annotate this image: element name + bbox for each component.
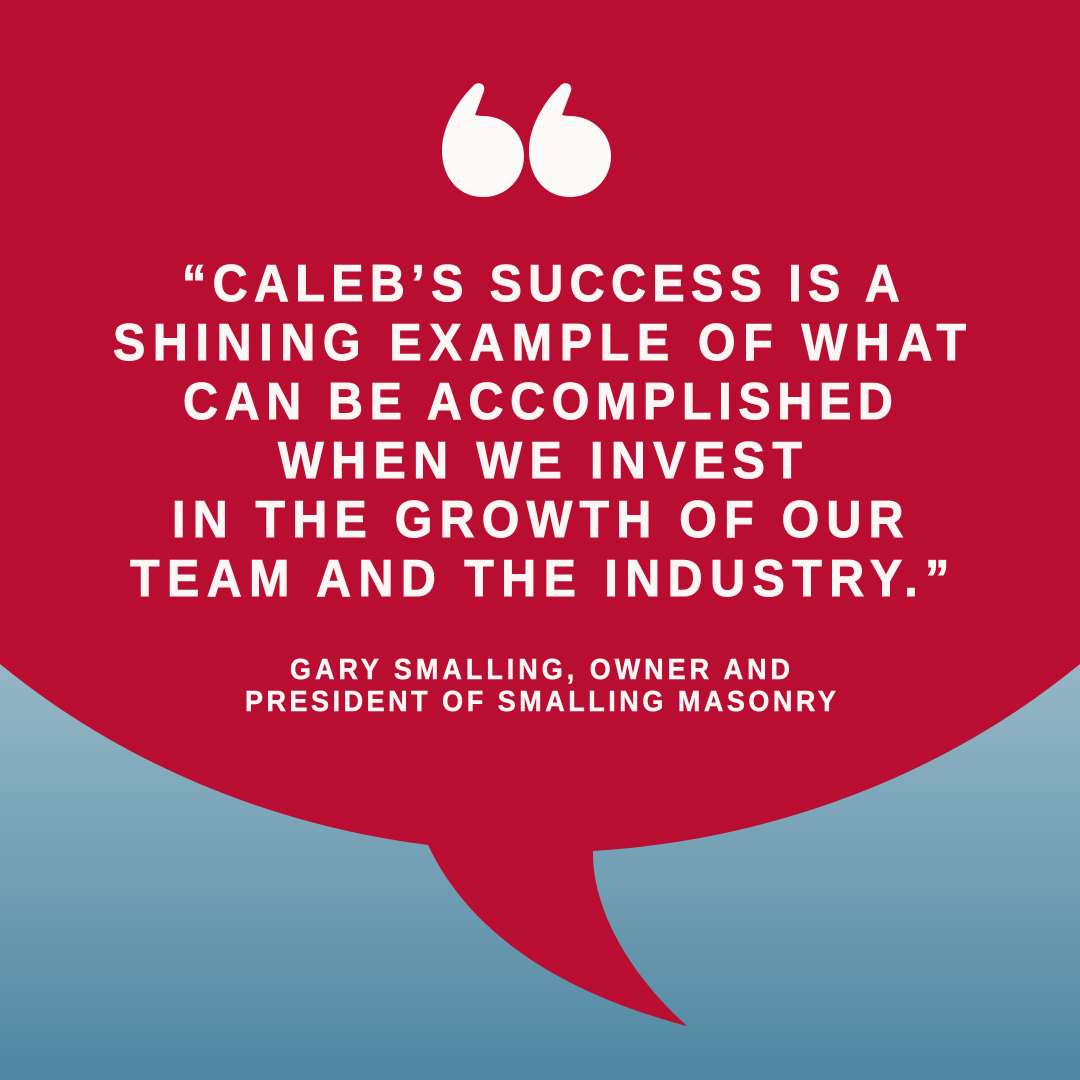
quote text: CAN BE ACCOMPLISHED: [183, 373, 900, 431]
quote text: SHINING EXAMPLE OF WHAT: [112, 314, 973, 372]
attribution: GARY SMALLING, OWNER AND: [290, 654, 794, 686]
quote text: “CALEB’S SUCCESS IS A: [182, 255, 906, 313]
quote text: WHEN WE INVEST: [278, 432, 809, 490]
icon: quotation mark: [442, 83, 611, 197]
quote text: [112, 255, 973, 608]
attribution: [244, 654, 839, 718]
quote text: IN THE GROWTH OF OUR: [172, 491, 911, 549]
attribution: PRESIDENT OF SMALLING MASONRY: [244, 686, 839, 718]
quote text: TEAM AND THE INDUSTRY.”: [130, 550, 956, 608]
